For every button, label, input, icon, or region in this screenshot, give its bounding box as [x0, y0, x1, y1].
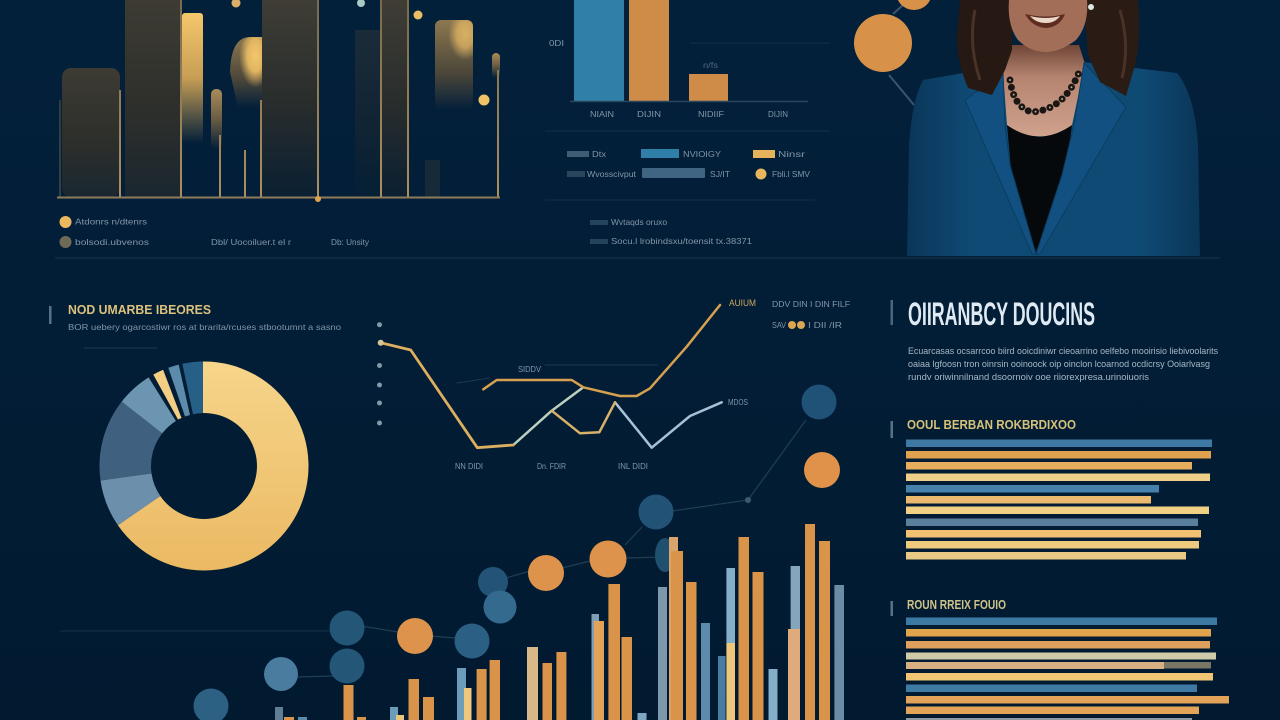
labels: line chart: SAV: [772, 320, 786, 330]
heading: donut section: BOR uebery ogarcostiwr ros at brarita/rcuses stbootumnt a sasno: [68, 322, 341, 332]
chart: top bar chart: [545, 0, 830, 200]
panel: right summary text: Ecuarcasas ocsarrcoo biird ooicdiniwr cieoarrino oelfebo mooirisio liebivoolarits: [908, 346, 1218, 357]
legend: top bar chart: NVIOIGY: [683, 149, 721, 159]
legend: column chart: Db: Unsity: [331, 237, 370, 247]
notes: lower legend: [590, 217, 752, 246]
axis dots: line chart: [377, 322, 382, 426]
chart: line chart: [378, 305, 722, 448]
chart: top bar chart: DIJIN: [637, 109, 661, 119]
labels: line chart: MDOS: [728, 397, 748, 407]
chart: top bar chart: NIAIN: [590, 109, 614, 119]
icon: orange connected circles: [854, 0, 932, 105]
legend: top bar chart: Ninsr: [778, 149, 805, 159]
panel: right summary text: OIIRANBCY DOUCINS: [908, 296, 1095, 332]
legend: column chart: bolsodi.ubvenos: [75, 237, 149, 247]
panel: right upper horizontal bars: OOUL BERBAN ROKBRDIXOO: [907, 417, 1076, 432]
labels: line chart: [455, 298, 850, 471]
legend: top bar chart: [567, 149, 810, 180]
chart: donut: [99, 361, 309, 570]
chart: top bar chart: 0DI: [549, 38, 564, 48]
panel: right summary text: [890, 296, 1218, 383]
panel: right lower horizontal bars: [890, 597, 1229, 720]
chart: top bar chart: NIDIIF: [698, 109, 724, 119]
panel: right upper horizontal bars: [890, 417, 1212, 560]
panel: right summary text: rundv oriwinnilnand dsoornoiv ooe riiorexpresa.urinoiuoris: [908, 372, 1149, 383]
labels: line chart: AUIUM: [729, 298, 756, 308]
labels: line chart: I DII /IR: [808, 320, 842, 330]
legend: column chart: Dbl/ Uocoiluer.t el r: [211, 237, 291, 247]
legend: top bar chart: Wvosscivput: [587, 169, 637, 179]
labels: line chart: NN DIDI: [455, 461, 483, 471]
panel: right summary text: oaiaa lgfoosn tron oinrsin ooinoock oip oinclon lcoarnod ocdicrsy Ooiarlvasg: [908, 359, 1210, 370]
labels: line chart: SIDDV: [518, 364, 541, 374]
heading: donut section: [49, 302, 341, 348]
labels: line chart: INL DIDI: [618, 461, 648, 471]
chart: glowing column chart: [57, 0, 500, 202]
notes: lower legend: Wvtaqds oruxo: [611, 217, 667, 227]
chart: network of circles: [60, 384, 840, 720]
chart: bottom grouped bars: [275, 524, 844, 720]
legend: top bar chart: Fbli.l SMV: [772, 169, 810, 179]
chart: top bar chart: DIJIN: [768, 109, 788, 119]
legend: top bar chart: Dtx: [592, 149, 607, 159]
legend: column chart: [60, 216, 370, 248]
legend: top bar chart: SJ/IT: [710, 169, 730, 179]
portrait: woman in blue blazer: [907, 0, 1200, 256]
chart: top bar chart: n/fs: [703, 60, 718, 70]
panel: right lower horizontal bars: ROUN RREIX FOUIO: [907, 597, 1006, 612]
labels: line chart: DDV DIN I DIN FILF: [772, 299, 850, 309]
heading: donut section: NOD UMARBE IBEORES: [68, 302, 211, 317]
legend: column chart: Atdonrs n/dtenrs: [75, 216, 147, 226]
notes: lower legend: Socu.l lrobindsxu/toensit tx.38371: [611, 236, 752, 246]
labels: line chart: Dn. FDIR: [537, 461, 566, 471]
divider rule: [55, 257, 1220, 259]
